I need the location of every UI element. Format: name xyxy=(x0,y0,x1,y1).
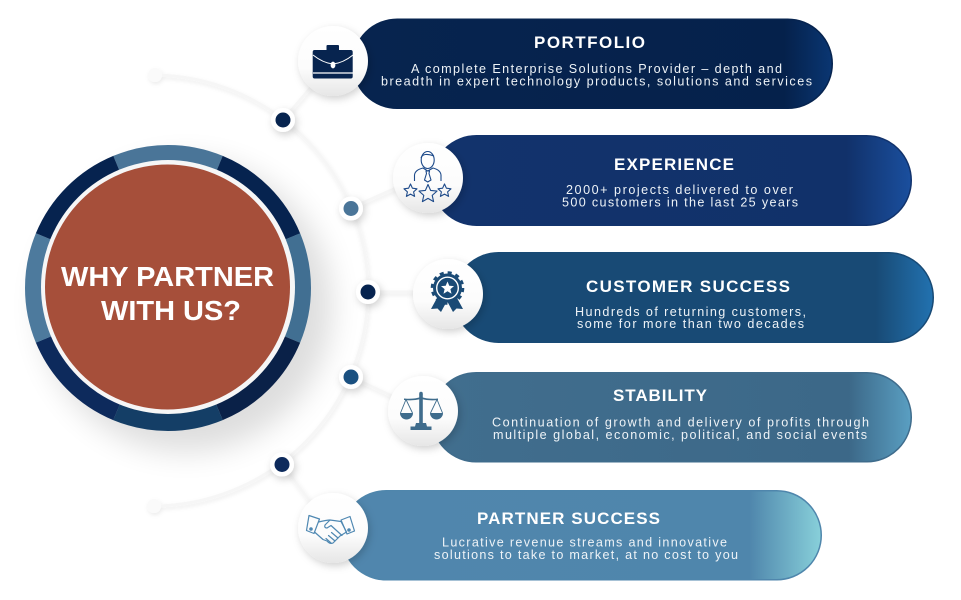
body text: experience: 500 customers in the last 25 years xyxy=(562,196,798,210)
panel: experience xyxy=(432,136,911,225)
segmented ring xyxy=(0,113,343,463)
heading: partner success: PARTNER SUCCESS xyxy=(477,509,660,528)
body text: portfolio: A complete Enterprise Solutions Provider – depth and xyxy=(411,62,782,76)
body text: experience: 2000+ projects delivered to over xyxy=(566,183,793,197)
icon: person with stars xyxy=(393,143,463,213)
node dot 5 xyxy=(270,452,294,476)
node dot 1 xyxy=(271,108,295,132)
body text: stability: multiple global, economic, political, and social events xyxy=(493,428,867,442)
body text: customer success: Hundreds of returning customers, xyxy=(575,305,806,319)
heading: experience: EXPERIENCE xyxy=(614,155,734,174)
node dot 3 xyxy=(356,280,380,304)
body text: portfolio xyxy=(381,62,812,88)
central badge xyxy=(0,113,343,463)
icon: balance scales xyxy=(388,376,458,446)
body text: experience xyxy=(562,183,798,210)
body text: stability: Continuation of growth and delivery of profits through xyxy=(492,416,869,430)
panel: customer success xyxy=(454,253,933,342)
badge title xyxy=(61,261,274,326)
badge title: WITH US? xyxy=(101,295,241,326)
icon: award rosette xyxy=(413,259,483,329)
body text: partner success: solutions to take to market, at no cost to you xyxy=(434,548,738,562)
panel: stability xyxy=(432,373,911,462)
badge title: WHY PARTNER xyxy=(61,261,274,292)
connector arc xyxy=(147,68,416,513)
body text: portfolio: breadth in expert technology products, solutions and services xyxy=(381,74,812,88)
panel: portfolio xyxy=(353,19,832,108)
body text: customer success: some for more than two decades xyxy=(577,317,804,331)
icon: handshake xyxy=(298,493,368,563)
heading: customer success: CUSTOMER SUCCESS xyxy=(586,277,790,296)
body text: stability xyxy=(492,416,869,442)
body text: customer success xyxy=(575,305,806,331)
node dot 4 xyxy=(339,365,363,389)
panel: partner success xyxy=(342,491,821,580)
body text: partner success xyxy=(434,536,738,562)
icon: briefcase xyxy=(298,26,368,96)
node dot 2 xyxy=(339,196,363,220)
heading: stability: STABILITY xyxy=(613,386,708,405)
body text: partner success: Lucrative revenue streams and innovative xyxy=(442,536,727,550)
heading: portfolio: PORTFOLIO xyxy=(534,33,645,52)
